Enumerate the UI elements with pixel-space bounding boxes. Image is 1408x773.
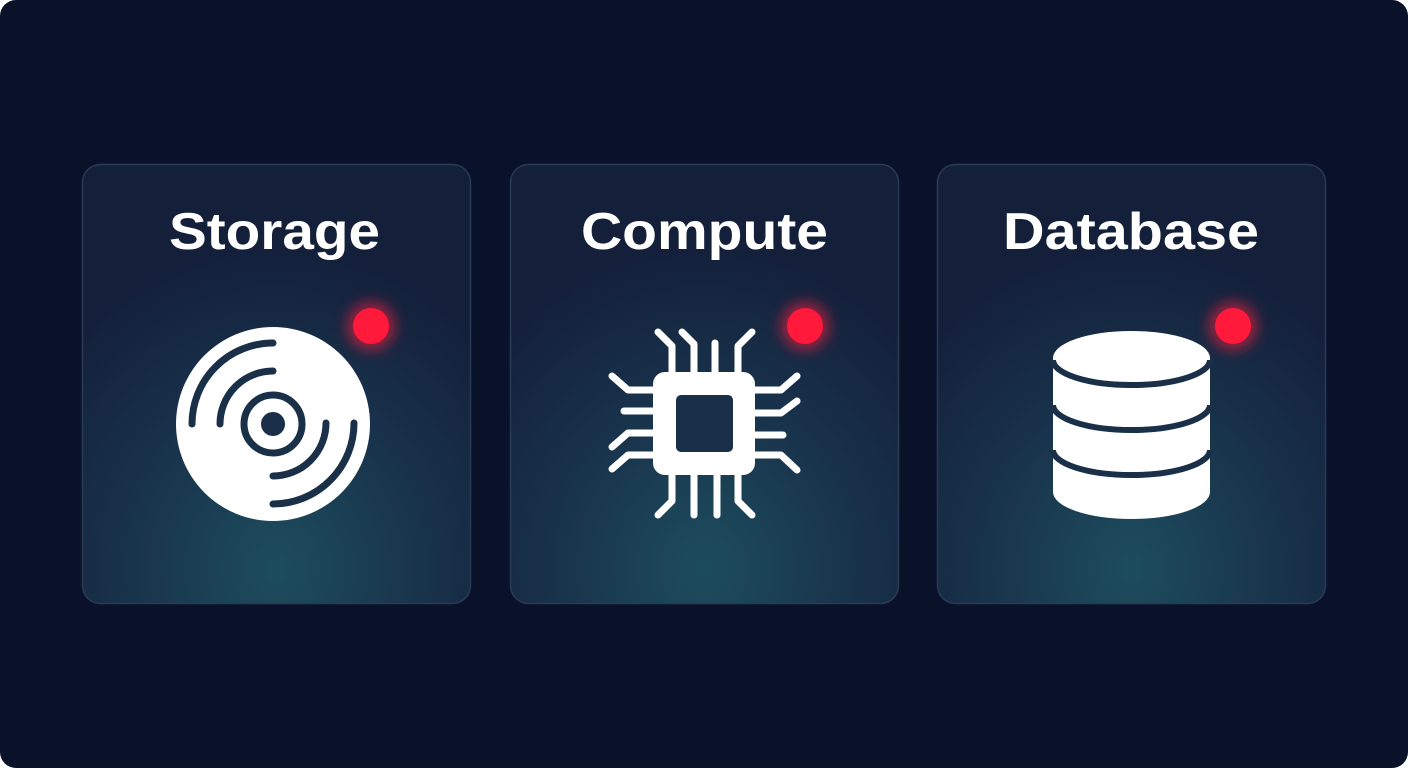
panel: compute [510, 164, 898, 604]
heading: Database: Database [1003, 203, 1259, 261]
panel: database [938, 164, 1326, 604]
heading: Storage: Storage [169, 203, 380, 261]
icon: chip [612, 332, 797, 515]
status dot: database [1209, 302, 1257, 350]
heading: Compute: Compute [581, 203, 828, 261]
status dot: storage [347, 302, 395, 350]
icon: disc [176, 327, 370, 521]
status dot: compute [781, 302, 829, 350]
icon: database cylinder [1053, 331, 1210, 519]
panel: storage [82, 164, 470, 604]
